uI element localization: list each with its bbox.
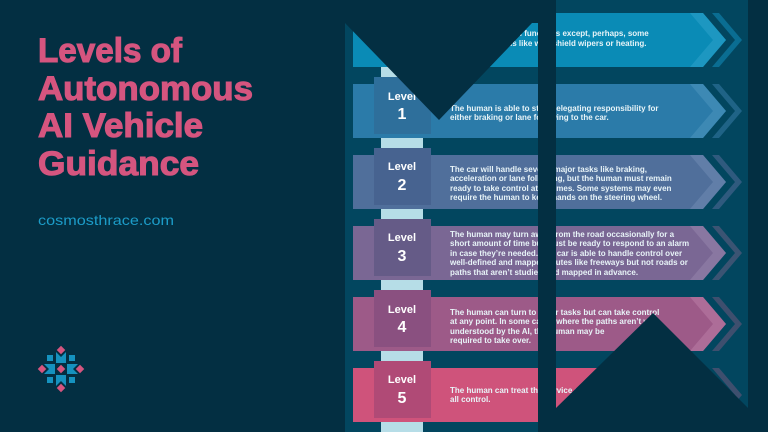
- row: level 5: [353, 361, 742, 422]
- row: level 1: The human is able to start delegating responsibility for: [450, 104, 658, 113]
- row: level 3: The human may turn away from the road occasionally for a: [450, 230, 675, 239]
- row: level 1: [353, 77, 742, 138]
- row: level 3: short amount of time but must be ready to respond to an alarm: [450, 239, 689, 248]
- row: level 2: [353, 148, 742, 209]
- row: level 3: paths that aren’t studied and mapped in advance.: [450, 268, 638, 277]
- icon: logo: [38, 346, 84, 392]
- row: level 4: 4: [398, 319, 407, 336]
- row: level 3: well-defined and mapped routes like freeways but not roads or: [449, 258, 688, 267]
- row: level 5: Level: [388, 374, 416, 386]
- row: level 1: Level: [388, 91, 416, 103]
- row: level 1: 1: [398, 106, 407, 123]
- title: [38, 32, 253, 183]
- row: level 2: The car will handle several major tasks like braking,: [450, 165, 647, 174]
- row: level 4: required to take over.: [450, 336, 531, 345]
- row: level 1: either braking or lane following to the car.: [450, 113, 609, 122]
- row: level 2: Level: [388, 161, 416, 173]
- title: Levels of: [38, 32, 183, 70]
- title: AI Vehicle: [38, 107, 203, 145]
- row: level 0: auxiliary systems like windshield wipers or heating.: [450, 39, 647, 48]
- row: level 2: acceleration or lane following, but the human must remain: [450, 174, 672, 183]
- row: level 0: [353, 13, 742, 67]
- website url: cosmosthrace.com: [38, 212, 174, 228]
- title: Autonomous: [38, 70, 253, 108]
- row: level 5: 5: [398, 390, 407, 407]
- panel: levels: [345, 0, 748, 432]
- row: level 3: Level: [388, 232, 416, 244]
- row: level 4: understood by the AI, the human may be: [450, 327, 605, 336]
- row: level 4: Level: [388, 304, 416, 316]
- title: Guidance: [38, 145, 199, 183]
- row: level 3: 3: [398, 248, 407, 265]
- row: level 0: The car handles all functions except, perhaps, some: [450, 29, 649, 38]
- row: level 2: ready to take control at all times. Some systems may even: [450, 184, 672, 193]
- row: level 5: all control.: [450, 395, 490, 404]
- decorative M overlay: [340, 0, 768, 432]
- row: level 3: [353, 219, 742, 280]
- row: level 4: at any point. In some cases where the paths aren’t well: [450, 317, 659, 326]
- row: level 2: require the human to keep hands on the steering wheel.: [450, 193, 662, 202]
- row: level 5: The human can treat the service as a taxi and relinquish: [450, 386, 663, 395]
- row: level 2: 2: [398, 177, 407, 194]
- vertical connector: [381, 20, 423, 432]
- row: level 4: The human can turn to other tasks but can take control: [450, 308, 659, 317]
- row: level 3: in case they’re needed. The car is able to handle control over: [450, 249, 682, 258]
- row: level 4: [353, 290, 742, 351]
